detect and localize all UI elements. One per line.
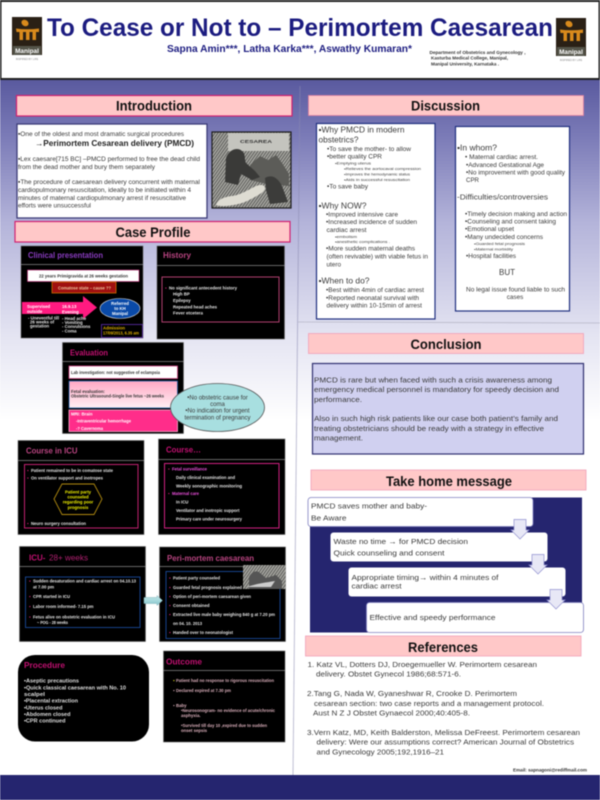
panel: conclusion text: treating obstetricians should be ready with a strategy in effective — [314, 424, 544, 433]
slide: evaluation — [62, 342, 184, 434]
outcome list: ▪ — [173, 703, 175, 708]
panel: introduction text — [17, 124, 207, 218]
symptoms list — [62, 316, 91, 334]
arrow: step 2 to 3 — [529, 554, 547, 574]
panel: take home flow — [308, 498, 584, 632]
BUT statement: No legal issue found liable to such — [466, 286, 566, 294]
header banner — [0, 1, 600, 79]
panel: introduction text: ▪Lex caesare[715 BC] –PMCD performed to free the dead child — [18, 156, 200, 163]
symptoms list: - Coma — [62, 328, 77, 334]
antenatal notes — [28, 316, 59, 328]
references list: Aust N Z J Obstet Gynaecol 2000;40:405-8. — [313, 708, 470, 718]
heading: References — [306, 636, 581, 656]
references list: 3.Vern Katz, MD, Keith Balderston, Melissa DeFreest. Perimortem cesarean — [307, 728, 580, 737]
surveillance list: Daily clinical examination and — [176, 475, 235, 480]
why now: •embolism — [335, 235, 357, 239]
slide: history — [157, 246, 284, 339]
hexagon: patient party counseled: counseled — [67, 494, 89, 500]
procedure steps list: ▪ — [169, 612, 171, 617]
MRI box — [69, 410, 178, 432]
panel: conclusion text — [312, 364, 584, 454]
panel: introduction text: from the dead mother and bury them separately — [18, 164, 156, 171]
antenatal notes: 26 weeks of — [30, 320, 55, 324]
procedure steps list: on 04. 10. 2013 — [173, 621, 203, 626]
patient summary box: 22 years Primigravida at 26 weeks gestation — [39, 274, 128, 278]
procedure steps list: Patient party counseled — [173, 576, 220, 580]
surveillance list: Ventilator and inotropic support — [176, 508, 240, 513]
history list — [162, 277, 279, 322]
hexagon: patient party counseled: Patient party — [65, 490, 92, 494]
procedure steps list: ▪ — [169, 585, 171, 590]
arrow: ICU to peri-mortem — [144, 596, 162, 606]
in whom — [457, 144, 566, 184]
slide: evaluation: Evaluation — [70, 348, 108, 358]
callout: no obstetric cause: termination of pregnancy — [184, 416, 251, 422]
MRI box: MRI: Brain — [71, 412, 93, 416]
step 2: Waste no time → for PMCD decision — [334, 537, 468, 546]
step 4 — [366, 602, 584, 632]
affiliation: Department of Obstetrics and Gynecology , — [430, 50, 526, 55]
difficulties: •Timely decision making and action — [465, 211, 568, 218]
outcome list: Patient had no response to rigorous resuscitation — [176, 678, 274, 683]
BUT statement: BUT — [499, 268, 515, 277]
slide: course continued: Course… — [166, 446, 201, 454]
why PMCD: •better quality CPR — [327, 154, 382, 160]
callout: no obstetric cause — [170, 384, 264, 432]
references list: delivery: Were our assumptions correct? American Journal of Obstetrics — [316, 738, 574, 746]
panel: introduction text: ▪One of the oldest and most dramatic surgical procedures — [18, 131, 185, 138]
email: Email: sapnagoni@rediffmail.com — [513, 768, 587, 772]
in whom: ▪In whom? — [457, 144, 498, 152]
slide: outcome: Outcome — [166, 656, 202, 666]
difficulties: •Counseling and consent taking — [465, 218, 557, 226]
why PMCD: •To save baby — [327, 184, 369, 190]
outcome list: ▪ — [173, 688, 175, 693]
slide: procedure — [18, 655, 149, 742]
panel: conclusion text: management. — [314, 434, 363, 442]
heading: Take home message — [311, 470, 586, 490]
heading: References: References — [408, 640, 478, 655]
step 3: Appropriate timing→ within 4 minutes of — [352, 573, 500, 582]
history list: Epilepsy — [173, 298, 191, 303]
in whom: • Maternal cardiac arrest. — [465, 154, 538, 161]
procedure steps list: Extracted live male baby weighing 840 g at 7.20 pm — [173, 612, 275, 617]
procedure list: •CPR continued — [24, 718, 66, 724]
callout: no obstetric cause: coma — [210, 402, 225, 408]
difficulties: -Difficulties/controversies — [457, 192, 548, 202]
references list: 1. Katz VL, Dotters DJ, Droegemueller W. Perimortem cesarean — [308, 660, 537, 669]
procedure list: •Placental extraction — [24, 698, 79, 704]
surveillance list: In ICU — [176, 500, 188, 504]
procedure steps list: ▪ — [169, 576, 171, 580]
symptoms list: - Vomiting — [62, 320, 83, 325]
authors: Sapna Amin***, Latha Karka***, Aswathy Kumaran* — [167, 44, 412, 55]
heading: Conclusion — [308, 334, 584, 354]
in whom: •Advanced Gestational Age — [466, 162, 545, 169]
image: woodcut of caesarean delivery: CESAREA — [240, 139, 273, 144]
procedure steps list: Option of peri-mortem caesarean given — [173, 594, 251, 599]
icon: Manipal logo left: Manipal — [15, 48, 39, 55]
history list: High BP — [173, 292, 190, 296]
panel: introduction text: efforts were unsuccessful — [18, 202, 91, 210]
slide: ICU 28+ weeks: 28+ weeks — [49, 554, 88, 562]
in whom: •No improvement with good quality — [466, 170, 566, 176]
why now: •anesthetic complications . — [335, 240, 390, 244]
difficulties: •Guarded fetal prognosis — [474, 242, 525, 246]
step 2 — [330, 532, 548, 562]
why PMCD: •To save the mother- to allow — [327, 146, 411, 153]
procedure steps list: ▪ — [169, 630, 171, 635]
slide: ICU 28+ weeks: ICU- — [29, 554, 46, 562]
heading: Discussion: Discussion — [411, 98, 480, 114]
slide: ICU 28+ weeks — [20, 546, 146, 642]
ICU course list: ▪ — [27, 468, 29, 473]
why now: •Improved intensive care — [326, 212, 399, 218]
ICU events list: ▪ — [29, 594, 31, 599]
why now: •More sudden maternal deaths — [326, 246, 415, 252]
procedure list: •Uterus closed — [24, 706, 63, 712]
referral ellipse: Referred — [111, 301, 129, 306]
icon: Manipal logo left: INSPIRED BY LIFE — [16, 57, 39, 61]
symptoms list: - Head ache — [62, 316, 87, 321]
arrow: supervised outside to referral: Evening — [62, 310, 79, 314]
outcome list: asphyxia. — [181, 713, 201, 718]
why PMCD — [318, 126, 421, 190]
why PMCD: •Relieves the aortocaval compression — [344, 167, 421, 171]
panel: conclusion text: performance. — [314, 395, 362, 404]
slide: course in ICU — [18, 440, 144, 534]
when to do — [318, 276, 424, 310]
procedure steps list: ▪ — [169, 594, 171, 599]
panel: conclusion text: PMCD is rare but when faced with such a crisis awareness among — [314, 376, 552, 384]
when to do: •Reported neonatal survival with — [326, 295, 420, 302]
outcome list: Declared expired at 7.30 pm — [176, 688, 231, 693]
ICU events list: at 7.00 pm — [33, 584, 54, 590]
procedure steps list — [169, 576, 275, 635]
arrow: supervised outside to referral: outside — [27, 309, 43, 314]
heading: Introduction: Introduction — [116, 98, 192, 114]
procedure list: scalpel — [24, 692, 45, 698]
difficulties: •Maternal morbidity — [474, 248, 513, 252]
icon: Manipal logo right: INSPIRED BY LIFE — [560, 58, 583, 62]
admission box: 17/09/2013, 6.35 am — [103, 330, 139, 336]
surveillance list: Primary care under neurosurgery — [176, 516, 243, 522]
slide: course in ICU: Course in ICU — [26, 446, 78, 456]
in whom: CPR — [466, 177, 479, 184]
BUT statement — [466, 268, 566, 301]
admission box: Admission — [103, 326, 125, 330]
arrow: supervised outside to referral: 16.9.13 — [62, 304, 77, 309]
procedure list — [24, 678, 126, 724]
ICU course list: ▪ — [27, 521, 29, 526]
fetal evaluation box: Fetal evaluation: — [71, 389, 105, 394]
why now: utero — [326, 262, 341, 268]
why PMCD: ▪Why PMCD in modern — [318, 126, 404, 134]
history list: Repeated head aches — [173, 304, 218, 310]
step 1: Be Aware — [311, 514, 346, 522]
antenatal notes: gestation — [30, 324, 49, 328]
footer bar — [0, 775, 600, 800]
surveillance list: Weekly sonographic monitoring — [176, 484, 242, 488]
why PMCD: •Emptying uterus — [335, 162, 371, 166]
MRI box: -Intraventricular hemorrhage — [76, 418, 132, 424]
panel: introduction text: cardiopulmonary resuscitation, ideally to be initiated within 4 — [18, 187, 191, 194]
procedure list: •Abdomen closed — [24, 712, 71, 718]
referral ellipse: to KH — [114, 306, 126, 311]
outcome list: •Survived till day 10 ,expired due to sudden — [181, 723, 267, 728]
panel: introduction text: ▪The procedure of caesarean delivery concurrent with maternal — [18, 179, 200, 186]
procedure list: •Aseptic precautions — [24, 678, 79, 684]
affiliation — [430, 50, 526, 66]
slide: history: History — [163, 251, 192, 260]
panel: conclusion text: Also in such high risk patients like our case both patient’s family and — [314, 414, 558, 423]
ICU course list: On ventilator support and inotropes — [31, 476, 104, 480]
history list: Fever etcetera — [173, 310, 204, 316]
ICU course list: ▪ — [27, 476, 29, 480]
ICU course list: Neuro surgery consultation — [31, 521, 86, 526]
callout: no obstetric cause: •No indication for urgent — [185, 408, 250, 414]
ICU events list: ▪ — [29, 604, 31, 609]
referral ellipse — [100, 298, 140, 318]
MRI box: -? Cavernoma — [76, 426, 104, 431]
lab investigation box: Lab investigation: not suggestive of eclampsia — [71, 370, 161, 375]
when to do: •Best within 4min of cardiac arrest — [326, 287, 424, 294]
BUT statement: cases — [507, 294, 523, 301]
difficulties: •Hospital facilities — [466, 253, 516, 260]
surveillance list: Fetal surveillance — [172, 466, 208, 472]
ICU events list — [29, 578, 137, 625]
ICU course list — [27, 468, 114, 526]
heading: Case Profile — [15, 222, 290, 242]
references list: 2.Tang G, Nada W, Gyaneshwar R, Crooke D. Perimortem — [307, 689, 517, 698]
surveillance list: ▪ — [168, 466, 170, 472]
symptoms list: - Convulsions — [62, 324, 91, 329]
hexagon: patient party counseled: prognosis — [68, 505, 89, 510]
surveillance list — [168, 466, 243, 522]
history list: No significant antecedent history — [169, 286, 238, 290]
fetal evaluation box: Obstetric Ultrasound-Single live fetus ~26 weeks — [71, 394, 165, 398]
outcome list — [173, 678, 276, 733]
heading: Take home message: Take home message — [386, 474, 512, 489]
procedure steps list: Guarded fetal prognosis explained — [173, 585, 242, 590]
heading: Introduction — [16, 96, 292, 116]
history list: ▪ — [165, 286, 167, 290]
step 2: Quick counseling and consent — [334, 548, 444, 558]
admission box — [102, 324, 142, 338]
step 1 — [308, 498, 533, 526]
fetal evaluation box — [69, 381, 178, 408]
outcome list: Baby — [176, 703, 187, 708]
panel: discussion right — [456, 126, 570, 311]
why PMCD: •Aids in successful resuscitation — [344, 178, 410, 182]
outcome list: •Neurosonogram- no evidence of acute/chronic — [181, 708, 276, 713]
why now: •Increased incidence of sudden — [326, 219, 418, 226]
slide: course continued — [158, 439, 285, 534]
panel: introduction text: →Perimortem Cesarean delivery (PMCD) — [35, 139, 194, 148]
antenatal notes: - Uneventful till — [28, 316, 59, 320]
ICU events list: Sudden desaturation and cardiac arrest on 04.10.13 — [33, 578, 137, 584]
slide: clinical presentation — [21, 246, 143, 338]
references list — [307, 660, 580, 756]
slide: procedure: Procedure — [24, 660, 65, 670]
ICU course list: Patient remained to be in comatose state — [31, 468, 114, 473]
arrow: supervised outside to referral — [22, 296, 97, 319]
ICU events list: ▪ — [29, 614, 31, 620]
outcome list: ▪ — [173, 678, 175, 683]
affiliation: Manipal University, Karnataka . — [431, 62, 499, 66]
image: woodcut of caesarean delivery — [212, 132, 291, 208]
slide: peri-mortem caesarean: Peri-mortem caesarean — [167, 554, 254, 563]
why PMCD: •Improves the hemodynamic status — [344, 172, 410, 176]
step 3 — [348, 568, 566, 596]
why now: ▪Why NOW? — [318, 202, 367, 210]
procedure steps list: ▪ — [169, 603, 171, 608]
why now: cardiac arrest — [326, 227, 367, 234]
panel: conclusion text: emergency medical personnel is mandatory for speedy decision and — [314, 385, 559, 394]
panel: discussion left — [316, 124, 435, 319]
difficulties — [457, 192, 568, 260]
procedure steps list: Handed over to neonatologist — [173, 630, 234, 635]
procedure steps list: Consent obtained — [173, 603, 210, 608]
comatose state box: Comatose state – cause ?? — [58, 286, 111, 290]
icon: Manipal logo left — [12, 17, 42, 61]
ICU events list: CPR started in ICU — [33, 594, 70, 599]
why PMCD: obstetrics? — [318, 136, 359, 144]
when to do: delivery within 10-15min of arrest — [326, 302, 422, 310]
why now — [318, 202, 429, 268]
ICU events list: Fetus alive on obstetric evaluation in ICU — [33, 614, 115, 620]
arrow: step 1 to 2 — [511, 520, 529, 539]
difficulties: •Many undecided concerns — [465, 234, 543, 241]
procedure list: •Quick classical caesarean with No. 10 — [24, 686, 126, 692]
slide: outcome — [164, 651, 285, 742]
difficulties: •Emotional upset — [465, 226, 514, 233]
step 3: cardiac arrest — [352, 582, 402, 590]
arrow: supervised outside to referral: Supervised — [27, 304, 51, 309]
slide: clinical presentation: Clinical presentation — [28, 251, 103, 260]
ICU events list: ~ POG - 28 weeks — [37, 620, 69, 625]
references list: cesarean section: two case reports and a management protocol. — [314, 699, 544, 708]
heading: Conclusion: Conclusion — [410, 337, 482, 352]
image: woodcut thumbnail — [243, 565, 286, 589]
step 4: Effective and speedy performance — [370, 613, 496, 622]
why now: (often revivable) with viable fetus in — [326, 254, 429, 260]
step 1: PMCD saves mother and baby- — [311, 502, 428, 510]
heading: Case Profile: Case Profile — [116, 224, 191, 240]
ICU events list: Labor room informed- 7.15 pm — [33, 604, 94, 609]
hexagon: patient party counseled — [54, 484, 102, 514]
arrow: step 3 to 4 — [547, 590, 565, 609]
affiliation: Kasturba Medical College, Manipal, — [431, 56, 508, 60]
hexagon: patient party counseled: regarding poor — [63, 500, 94, 504]
referral ellipse: Manipal — [112, 311, 128, 316]
references list: delivery. Obstet Gynecol 1986;68:571-6. — [316, 670, 461, 678]
title: To Cease or Not to – Perimortem Caesarean — [47, 14, 553, 42]
panel: introduction text: minutes of maternal cardiopulmonary arrest if resuscitative — [18, 195, 186, 202]
icon: Manipal logo right — [556, 18, 586, 62]
slide: peri-mortem caesarean — [160, 547, 286, 642]
icon: Manipal logo right: Manipal — [559, 49, 583, 56]
ICU events list: ▪ — [29, 578, 31, 584]
surveillance list: ▪ — [168, 491, 170, 496]
heading: Discussion — [308, 96, 584, 116]
outcome list: onset sepsis — [181, 728, 208, 733]
when to do: ▪When to do? — [318, 276, 370, 286]
callout: no obstetric cause: •No obstetric cause for — [187, 396, 248, 402]
references list: and Gynecology 2005;192,1916–21 — [316, 748, 444, 756]
surveillance list: Maternal care — [172, 491, 200, 496]
